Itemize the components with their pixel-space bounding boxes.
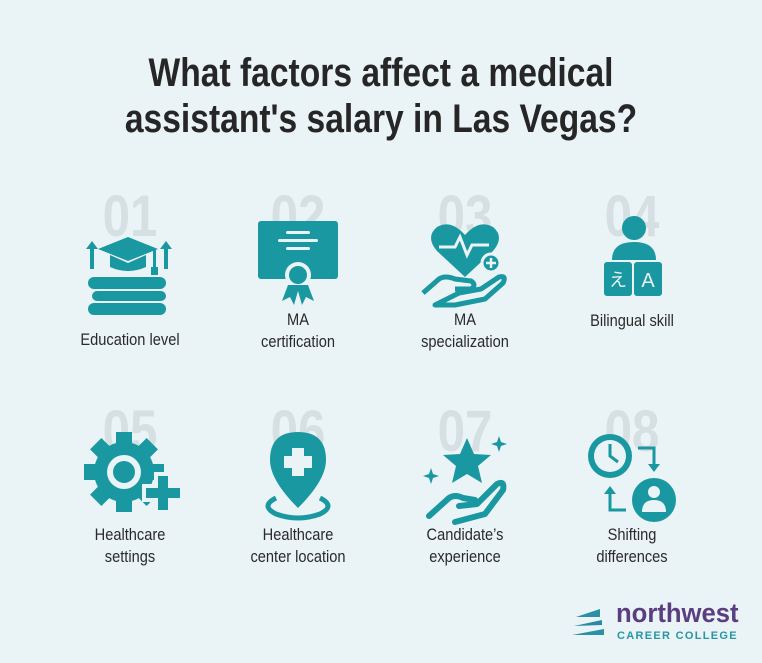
icon: clock and person with arrows: [588, 434, 676, 522]
item 2: MA certification: [258, 184, 338, 351]
title: assistant's salary in Las Vegas?: [125, 97, 637, 141]
item 5: healthcare settings: [84, 399, 180, 566]
icon: certificate: [258, 221, 338, 305]
item 8: shifting differences: [588, 399, 676, 566]
number 07: 07: [438, 399, 492, 464]
label: Healthcare: [95, 525, 165, 544]
icon: map pin with plus: [266, 432, 330, 520]
icon: graduation cap on books: [86, 237, 172, 315]
label: [250, 525, 346, 566]
label: Shifting: [608, 525, 656, 544]
logo: Northwest Career College: CAREER COLLEGE: [617, 630, 738, 642]
number 06: 06: [271, 399, 325, 464]
label: Candidate’s: [427, 525, 503, 544]
label: Healthcare: [263, 525, 333, 544]
item 3: MA specialization: [421, 184, 509, 351]
label: MA: [287, 310, 309, 329]
label: [95, 525, 165, 566]
logo text: northwest: [616, 598, 739, 628]
label: Bilingual skill: [590, 311, 674, 330]
label: [596, 525, 668, 566]
icon: heart in hand: [421, 224, 507, 308]
label: [421, 310, 509, 351]
icon: person with language bubbles: え: [609, 266, 627, 292]
icon: person with language bubbles: [604, 216, 662, 296]
label: Education level: [80, 330, 180, 349]
icon: star in hand: [423, 436, 507, 525]
number 05: 05: [103, 399, 157, 464]
logo mark: [572, 609, 604, 635]
item 6: healthcare center location: [250, 399, 346, 566]
item 7: candidate's experience: [423, 399, 507, 566]
number 01: 01: [103, 184, 157, 249]
number 02: 02: [271, 184, 325, 249]
icon: gear with plus: [84, 432, 180, 512]
label: [427, 525, 503, 566]
number 04: 04: [605, 184, 659, 249]
number 03: 03: [438, 184, 492, 249]
label: differences: [596, 547, 668, 566]
logo: Northwest Career College: [572, 598, 739, 642]
label: center location: [250, 547, 346, 566]
title: [125, 51, 637, 141]
number 08: 08: [605, 399, 659, 464]
icon: person with language bubbles: A: [641, 270, 655, 292]
label: specialization: [421, 332, 509, 351]
title: What factors affect a medical: [149, 51, 613, 95]
label: settings: [105, 547, 155, 566]
item 4: bilingual skill: [590, 184, 674, 330]
label: [261, 310, 335, 351]
label: MA: [454, 310, 476, 329]
item 1: education level: [80, 184, 180, 349]
label: experience: [429, 547, 501, 566]
label: certification: [261, 332, 335, 351]
